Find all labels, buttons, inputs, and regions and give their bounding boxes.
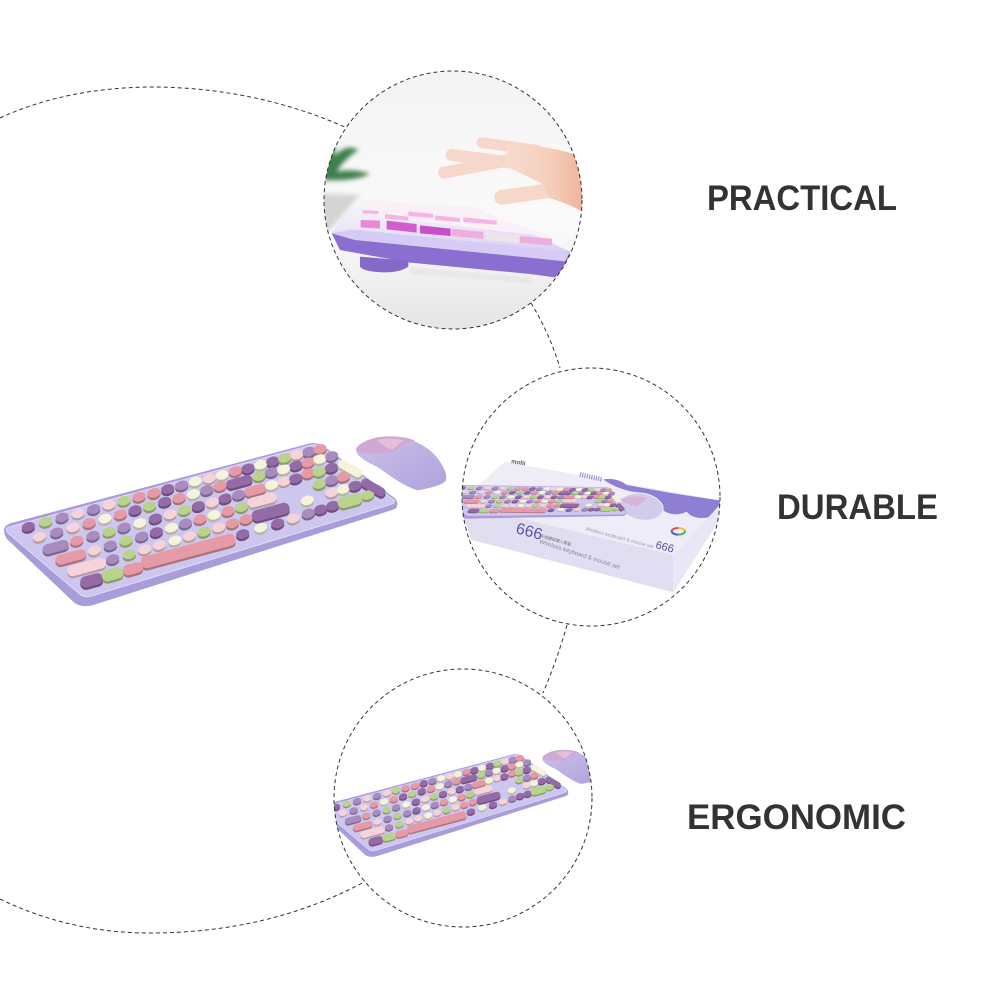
- main wireless mouse: [356, 436, 446, 490]
- circle 3: keyboard and mouse photo: [334, 750, 590, 882]
- box Chinese caption: 无线键鼠键入套装: [540, 532, 572, 547]
- heading: ergonomic: ERGONOMIC: [687, 798, 906, 837]
- box brand name: mofii: [511, 459, 526, 468]
- dashed connector: second to third circle: [543, 625, 567, 693]
- heading: practical: PRACTICAL: [707, 179, 897, 218]
- box model number right: 666: [654, 539, 675, 556]
- circle 2 dashed outline: [462, 368, 720, 626]
- box model number left: 666: [514, 520, 544, 544]
- dashed connector: lower large arc: [0, 881, 366, 933]
- main keyboard: [4, 443, 397, 606]
- dashed connector: first to second circle: [531, 303, 560, 368]
- logo on box: [672, 528, 685, 535]
- circle 1: hand over keyboard photo: [320, 70, 590, 335]
- circle 1 dashed outline: [324, 71, 582, 329]
- circle 3 dashed outline: [334, 669, 592, 927]
- circle 2: product box photo: [462, 460, 720, 592]
- heading: durable: DURABLE: [777, 488, 938, 527]
- box English caption: Wireless keyboard & mouse set: [538, 539, 621, 571]
- box caption right: Wireless keyboard & mouse set: [584, 526, 655, 550]
- dashed connector: upper large arc: [0, 87, 347, 128]
